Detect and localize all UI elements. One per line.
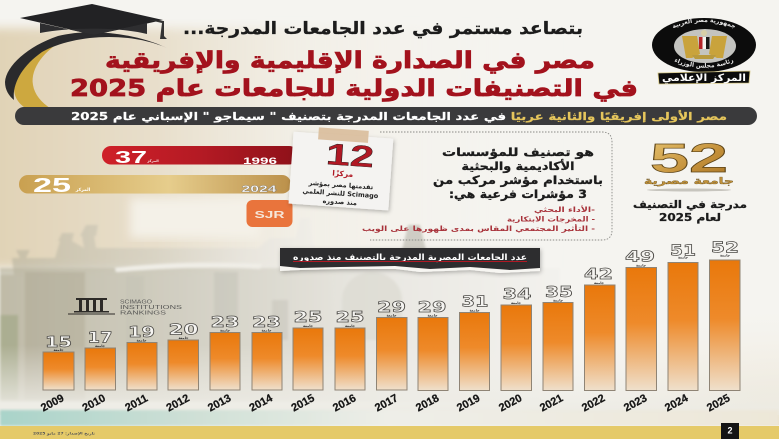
bar 2022: 2022 xyxy=(580,392,607,414)
bar 2014: 2014 xyxy=(247,392,275,414)
bar: 2024 rank: 2024 xyxy=(242,184,276,194)
bar 2016: 2016 xyxy=(331,392,358,414)
big stat: 52 universities xyxy=(633,135,747,224)
logo: Scimago Institutions Rankings: RANKINGS xyxy=(120,310,166,316)
bar 2023: 2023 xyxy=(622,392,649,414)
bar 2019: 31 xyxy=(462,292,488,310)
bar 2016 xyxy=(331,308,365,414)
big stat: 52 universities: جامعة مصرية xyxy=(644,176,734,187)
bar 2025: جامعة xyxy=(720,254,731,258)
bar: 1996 rank xyxy=(102,146,298,167)
note card: 12 ranks: تقدمتها مصر بمؤشر xyxy=(307,179,373,191)
bar: 2024 rank xyxy=(19,175,291,197)
bar 2011: 19 xyxy=(128,323,155,341)
bar 2010 xyxy=(80,328,116,414)
logo: Scimago Institutions Rankings: SCIMAGO xyxy=(120,300,153,306)
bar 2024: 51 xyxy=(670,242,696,260)
bar 2024: جامعة xyxy=(678,256,689,260)
bar: 1996 rank: المركز xyxy=(146,159,159,163)
bar 2010: 17 xyxy=(88,328,112,346)
bar 2025: 52 xyxy=(711,238,739,256)
bar 2017 xyxy=(373,298,407,414)
bar: 1996 rank: 37 xyxy=(115,147,147,167)
bar 2022 xyxy=(580,265,615,414)
panel: definition with dashed border xyxy=(362,132,612,240)
logo: media center emblem: المركز الإعلامي xyxy=(662,73,746,84)
bar 2011: 2011 xyxy=(123,392,150,414)
bar 2016: جامعة xyxy=(345,324,356,328)
definition text: الأكاديمية والبحثية xyxy=(462,159,574,174)
bar 2021: جامعة xyxy=(553,298,564,302)
bar 2010: جامعة xyxy=(95,344,106,348)
bar 2018: 2018 xyxy=(414,392,441,414)
logo: media center emblem: جمهورية مصر العربية xyxy=(673,18,735,29)
bar: 2024 rank: 25 xyxy=(33,175,71,197)
bar 2015: جامعة xyxy=(303,324,314,328)
indicators list: - التأثير المجتمعي المقاس بمدى ظهورها على الويب xyxy=(362,224,595,233)
bar 2009: جامعة xyxy=(53,348,64,352)
bar 2014 xyxy=(247,313,282,414)
note card: 12 ranks: 12 xyxy=(325,138,375,174)
indicators list: -الأداء البحثي xyxy=(534,205,595,214)
subtitle strip xyxy=(15,107,757,125)
footer band xyxy=(0,426,779,439)
big stat: 52 universities: مدرجة في التصنيف xyxy=(633,199,747,211)
bar 2009: 2009 xyxy=(39,392,66,414)
bar 2020: 2020 xyxy=(497,392,524,414)
overline heading: بتصاعد مستمر في عدد الجامعات المدرجة... xyxy=(183,19,583,39)
subtitle strip: مصر الأولى إفريقيًا والثانية عربيًا في عدد الجامعات المدرجة بتصنيف " سيماجو " الإسباني عام 2025 xyxy=(71,110,727,123)
bar 2015: 2015 xyxy=(289,392,317,414)
title xyxy=(70,48,638,102)
bar 2011: جامعة xyxy=(136,338,147,342)
page number: 2 xyxy=(727,426,733,436)
bar 2013: 2013 xyxy=(206,392,233,414)
bar 2019: جامعة xyxy=(469,308,480,312)
bar 2015 xyxy=(289,308,323,414)
bar 2017: جامعة xyxy=(386,314,397,318)
definition text: 3 مؤشرات فرعية هي: xyxy=(449,187,587,202)
SJR badge xyxy=(246,200,292,227)
bar 2025 xyxy=(705,238,740,414)
bar 2020 xyxy=(497,285,532,414)
bar 2021 xyxy=(538,283,573,414)
big stat: 52 universities: لعام 2025 xyxy=(659,212,721,224)
bar 2012: 2012 xyxy=(164,392,192,414)
bar 2021: 2021 xyxy=(538,392,565,414)
note card: 12 ranks: منذ صدوره xyxy=(322,197,357,207)
bar 2013 xyxy=(206,313,240,414)
title: في التصنيفات الدولية للجامعات عام 2025 xyxy=(70,76,638,102)
bar 2017: 29 xyxy=(377,298,406,316)
bar 2022: 42 xyxy=(584,265,613,283)
logo: media center emblem: رئاسة مجلس الوزراء xyxy=(674,58,734,69)
bar 2012 xyxy=(164,320,199,414)
bar 2012: 20 xyxy=(168,320,199,338)
bar 2014: 23 xyxy=(252,313,281,331)
icon: eagle xyxy=(682,30,727,59)
bar 2024 xyxy=(663,242,698,414)
bar 2018 xyxy=(414,298,448,414)
bar 2014: جامعة xyxy=(261,328,272,332)
bar 2015: 25 xyxy=(294,308,322,326)
bar 2018: 29 xyxy=(418,298,446,316)
logo: Scimago Institutions Rankings: INSTITUTIONS xyxy=(120,305,182,311)
bar: 2024 rank: المركز xyxy=(75,187,91,193)
definition text: هو تصنيف للمؤسسات xyxy=(442,145,594,160)
icon: graduation cap and crescent xyxy=(5,4,167,124)
SJR badge: SJR xyxy=(254,209,285,221)
bar 2017: 2017 xyxy=(373,392,400,414)
bar 2013: جامعة xyxy=(220,328,231,332)
note card: 12 ranks: Scimago للنشر العلمي xyxy=(302,187,379,200)
chart title: torn label xyxy=(280,248,540,273)
bar 2020: جامعة xyxy=(511,301,522,305)
tape xyxy=(318,127,369,143)
bar 2025: 2025 xyxy=(705,392,732,414)
bar 2022: جامعة xyxy=(594,281,605,285)
definition text: باستخدام مؤشر مركب من xyxy=(433,173,603,188)
bar chart: universities per year xyxy=(39,238,740,414)
footer date: تاريخ الإصدار: 27 مايو 2025 xyxy=(33,432,96,436)
big stat: 52 universities: 52 xyxy=(650,135,728,181)
bar 2016: 25 xyxy=(336,308,364,326)
indicators list xyxy=(362,205,595,233)
bar: 1996 rank: 1996 xyxy=(243,156,277,166)
bar 2023: 49 xyxy=(625,248,655,266)
bar 2009: 15 xyxy=(45,333,72,351)
bar 2024: 2024 xyxy=(663,392,691,414)
logo: media center emblem xyxy=(652,18,756,84)
title: مصر في الصدارة الإقليمية والإفريقية xyxy=(105,48,595,74)
bar 2021: 35 xyxy=(545,283,573,301)
definition text xyxy=(433,145,603,202)
chart title: torn label: عدد الجامعات المصرية المدرجة بالتصنيف منذ صدوره xyxy=(293,253,527,263)
bar 2012: جامعة xyxy=(178,336,189,340)
indicators list: - المخرجات الابتكارية xyxy=(507,216,595,224)
page number xyxy=(721,423,739,439)
bar 2011 xyxy=(123,323,157,414)
bar 2018: جامعة xyxy=(427,314,438,318)
bar 2019 xyxy=(455,292,490,414)
bar 2023: جامعة xyxy=(636,264,647,268)
bar 2019: 2019 xyxy=(455,392,482,414)
logo: Scimago Institutions Rankings xyxy=(68,298,182,316)
bar 2009 xyxy=(39,333,74,414)
bar 2020: 34 xyxy=(502,285,532,303)
bar 2023 xyxy=(622,248,656,414)
note card: 12 ranks xyxy=(289,126,394,210)
bar 2010: 2010 xyxy=(80,392,108,414)
note card: 12 ranks: مركزًا xyxy=(332,168,354,179)
bar 2013: 23 xyxy=(210,313,240,331)
